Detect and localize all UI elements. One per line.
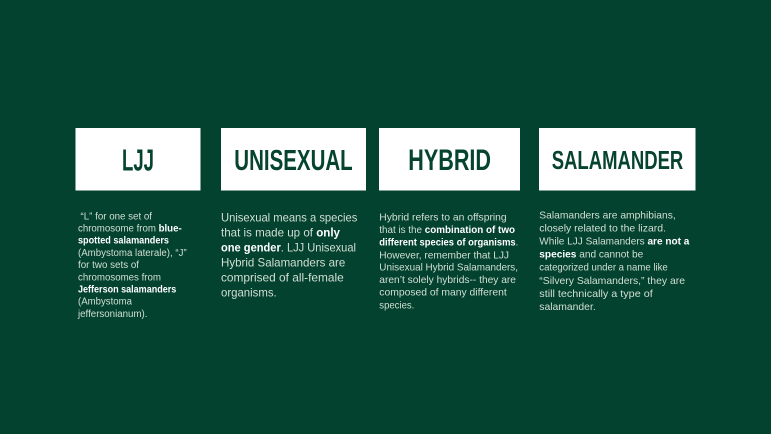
text block: LJJ definition: chromosomes from — [78, 272, 161, 283]
text block: LJJ definition: jeffersonianum). — [77, 309, 148, 320]
text block: Salamander definition: Salamanders are amphibians, — [539, 211, 676, 222]
text block: Hybrid definition: species. — [379, 300, 414, 311]
text block: LJJ definition — [77, 212, 187, 320]
text block: Salamander definition: “Silvery Salamanders,” they are — [539, 276, 685, 287]
heading box: LJJ: LJJ — [122, 143, 154, 178]
text block: Hybrid definition: aren’t solely hybrids-- they are — [379, 275, 516, 286]
text block: LJJ definition: chromosome from blue- — [78, 224, 182, 234]
text block: Hybrid definition: that is the combination of two — [379, 225, 515, 236]
text block: Hybrid definition: However, remember that LJJ — [379, 250, 509, 261]
text block: Unisexual definition: comprised of all-female — [221, 271, 344, 285]
text block: Hybrid definition: Unisexual Hybrid Salamanders, — [379, 263, 518, 274]
heading box: Salamander: SALAMANDER — [552, 147, 683, 175]
text block: Unisexual definition: Unisexual means a species — [221, 210, 357, 224]
text block: Unisexual definition: that is made up of only — [221, 225, 340, 239]
heading box: Hybrid: HYBRID — [408, 144, 491, 177]
text block: Salamander definition: still technically a type of — [539, 289, 653, 300]
text block: Hybrid definition — [379, 212, 518, 311]
text block: Salamander definition: salamander. — [539, 302, 596, 313]
text block: Unisexual definition: one gender. LJJ Unisexual — [221, 241, 356, 255]
heading box: Hybrid — [379, 128, 520, 190]
heading box: Salamander — [539, 128, 696, 190]
text block: LJJ definition: (Ambystoma laterale), “J” — [78, 248, 187, 259]
text block: LJJ definition: (Ambystoma — [78, 297, 132, 308]
text block: Salamander definition: closely related to the lizard. — [539, 224, 666, 235]
heading box: LJJ — [76, 128, 200, 190]
text block: Salamander definition: species and cannot be — [539, 249, 644, 260]
text block: LJJ definition: “L” for one set of — [80, 212, 152, 222]
heading box: Unisexual — [221, 128, 366, 190]
panel: Unisexual — [221, 128, 366, 300]
text block: Salamander definition: While LJJ Salamanders are not a — [539, 236, 690, 247]
text block: Hybrid definition: Hybrid refers to an offspring — [379, 212, 507, 223]
text block: Unisexual definition — [221, 210, 357, 300]
panel: Hybrid — [379, 128, 520, 311]
text block: LJJ definition: for two sets of — [78, 260, 139, 271]
text block: Salamander definition: categorized under a name like — [539, 263, 668, 274]
text block: LJJ definition: Jefferson salamanders — [78, 285, 177, 296]
text block: Hybrid definition: composed of many different — [379, 288, 507, 299]
text block: Unisexual definition: Hybrid Salamanders are — [221, 255, 346, 269]
text block: LJJ definition: spotted salamanders — [78, 236, 169, 246]
panel: LJJ — [76, 128, 200, 320]
text block: Hybrid definition: different species of organisms. — [379, 237, 518, 248]
text block: Unisexual definition: organisms. — [221, 286, 277, 300]
panel: Salamander — [539, 128, 696, 313]
text block: Salamander definition — [539, 211, 690, 313]
heading box: Unisexual: UNISEXUAL — [234, 145, 353, 177]
